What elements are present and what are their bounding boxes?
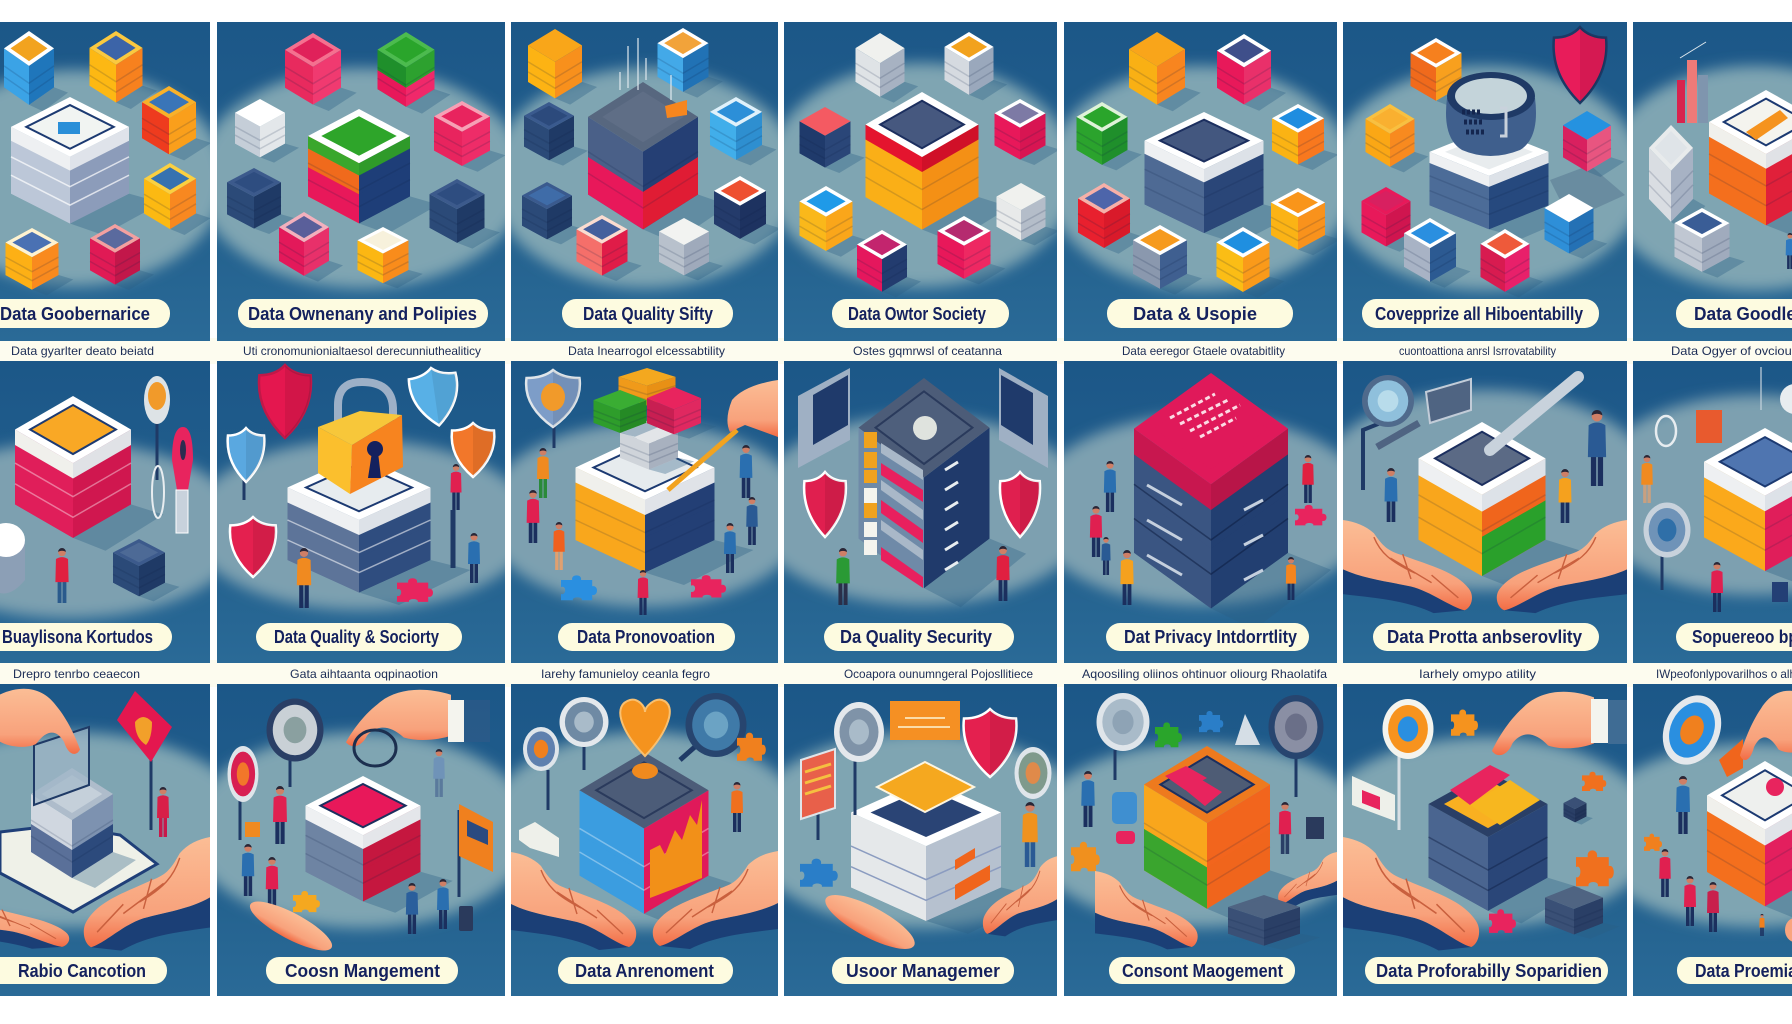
loop bbox=[1656, 416, 1676, 446]
person: blue bbox=[242, 844, 254, 896]
hand: right bbox=[1497, 520, 1627, 613]
circle sign bbox=[1014, 747, 1052, 799]
cube: pink bbox=[994, 99, 1060, 165]
monitor: right bbox=[999, 368, 1048, 468]
shield: light blue bbox=[407, 365, 463, 429]
label pill: Usoor Managemer bbox=[846, 961, 1000, 981]
panel: Consont Maogement bbox=[1064, 684, 1337, 996]
orange note bbox=[1719, 739, 1743, 777]
icon: lock on server bbox=[58, 122, 80, 134]
cylinder bbox=[0, 523, 25, 593]
small dark box bbox=[459, 906, 473, 931]
puzzle: yellow bbox=[293, 891, 320, 912]
ring bbox=[354, 730, 396, 766]
orange sign on pole bbox=[459, 804, 493, 897]
main server bbox=[576, 435, 753, 585]
label pill: Data Quality Sifty bbox=[583, 304, 713, 324]
label pill: Data Anrenoment bbox=[575, 961, 714, 981]
central multi colour stack bbox=[308, 109, 439, 234]
caption: Ostes gqmrwsl of ceatanna bbox=[853, 344, 1002, 358]
label pill: Consont Maogement bbox=[1122, 961, 1283, 981]
panel: Data Pronovoation bbox=[511, 361, 778, 663]
puzzle: orange bbox=[1644, 834, 1662, 851]
cube: orange bbox=[6, 228, 73, 295]
label pill: Data Ownenany and Polipies bbox=[248, 304, 477, 324]
drawer tags bbox=[955, 848, 990, 900]
puzzle: orange top bbox=[1451, 709, 1478, 736]
label pill: Data & Usopie bbox=[1133, 304, 1257, 324]
person: red mid bbox=[1684, 876, 1696, 926]
cube: red bbox=[1480, 229, 1543, 297]
person: red front bbox=[638, 570, 648, 615]
panel: Buaylisona Kortudos bbox=[0, 361, 210, 663]
central orange and red stack bbox=[1709, 90, 1792, 238]
shadow bbox=[1550, 165, 1625, 220]
puzzle piece: pink bbox=[397, 578, 433, 602]
label pill bbox=[1677, 957, 1792, 984]
person: rear pair bbox=[1588, 410, 1606, 486]
hand with pencil bbox=[668, 380, 778, 490]
person: orange right bbox=[1286, 557, 1296, 600]
post bbox=[450, 510, 456, 568]
puzzle: orange lower bbox=[1576, 850, 1614, 886]
label pill: Dat Privacy Intdorrtlity bbox=[1124, 627, 1297, 647]
shield: orange bbox=[452, 423, 494, 477]
block: orange bbox=[618, 368, 691, 409]
top knob bbox=[913, 416, 937, 440]
cube: yellow bbox=[1216, 227, 1284, 298]
tower left face rows bbox=[864, 432, 923, 588]
person: red right bbox=[1302, 455, 1314, 503]
panel: Data Goobernarice bbox=[0, 22, 210, 341]
panel: Data Proforabilly Soparidien bbox=[1343, 684, 1627, 996]
cube: green bbox=[1076, 102, 1142, 170]
tower top text bbox=[1170, 394, 1240, 437]
person: red right bbox=[1707, 882, 1719, 932]
person: small orange bbox=[1759, 914, 1765, 936]
cube: yellow bbox=[358, 227, 423, 288]
cube: pink lower bbox=[938, 216, 1005, 284]
label pill: Data Quality & Sociorty bbox=[274, 627, 439, 647]
panel: Sopuereoo bp bbox=[1633, 361, 1792, 663]
figure: ghost bbox=[433, 749, 445, 797]
label pill: Data Owtor Society bbox=[848, 304, 986, 324]
panel: Da Quality Security bbox=[784, 361, 1057, 663]
bar chart bbox=[1677, 42, 1708, 123]
orange note on stack bbox=[1746, 110, 1788, 140]
hand: left bbox=[1343, 837, 1479, 950]
cube: blue and grey bbox=[1404, 218, 1471, 288]
cube: navy lower bbox=[522, 182, 586, 244]
grey bar bbox=[1377, 423, 1419, 447]
pink blocks in box bbox=[1165, 766, 1222, 806]
dark small box bbox=[1306, 817, 1324, 839]
navy box bbox=[1428, 771, 1581, 923]
orange and green stack bbox=[1418, 422, 1581, 590]
white column bbox=[1649, 125, 1705, 231]
label pill bbox=[238, 299, 488, 328]
label pill: Buaylisona Kortudos bbox=[2, 627, 153, 647]
orange and pink stack bbox=[1707, 761, 1792, 919]
magnifier bbox=[680, 693, 746, 760]
cube: pink right bbox=[434, 101, 506, 172]
puzzle: pink bbox=[1489, 909, 1516, 933]
hand: left bbox=[0, 887, 69, 949]
magnifier bbox=[1362, 375, 1414, 490]
shield: red lower bbox=[230, 517, 276, 577]
shield: red top bbox=[259, 365, 311, 438]
label pill bbox=[1373, 623, 1599, 651]
cube: blue bbox=[1544, 194, 1607, 259]
cube: white bbox=[856, 33, 918, 103]
label pill bbox=[1362, 299, 1599, 328]
panel: Data Quality & Sociorty bbox=[217, 361, 505, 663]
cube: navy upper bbox=[524, 102, 588, 166]
grey plate bbox=[1426, 379, 1471, 423]
panel: Data Owtor Society bbox=[784, 22, 1057, 341]
cube: yellow bbox=[144, 163, 211, 235]
puzzle piece: pink bbox=[691, 575, 726, 598]
small navy box bbox=[1564, 797, 1593, 825]
label pill bbox=[832, 957, 1014, 984]
hand fragment bbox=[1785, 918, 1792, 942]
caption: Data eeregor Gtaele ovatabitlity bbox=[1122, 344, 1285, 358]
person: orange bbox=[1022, 802, 1038, 867]
caption: Data Ogyer of ovciour bbox=[1671, 344, 1792, 358]
person: blue mid bbox=[746, 497, 758, 545]
puzzle: blue bbox=[1199, 711, 1223, 732]
caption: Iarhely omypo atility bbox=[1419, 667, 1536, 681]
central navy and pink stack bbox=[588, 82, 729, 243]
person: blue back bbox=[740, 445, 752, 498]
cube: red and orange bbox=[142, 86, 211, 160]
cube: coral and navy bbox=[800, 107, 865, 173]
puzzle: orange bbox=[1071, 842, 1100, 871]
panel: Data Anrenoment bbox=[511, 684, 778, 996]
white circle bbox=[1780, 384, 1792, 414]
heart with base bbox=[620, 700, 670, 779]
label pill bbox=[0, 299, 170, 328]
small navy box bbox=[1772, 582, 1788, 602]
orange sign on pole bbox=[144, 376, 170, 518]
pole line bbox=[1760, 367, 1762, 410]
data tower bbox=[1134, 373, 1331, 630]
person: blue 2 bbox=[406, 883, 418, 934]
puzzle: orange bbox=[737, 733, 766, 761]
panel: Data Goodle bbox=[1633, 22, 1792, 341]
panel: Covepprize all Hiboentabilly bbox=[1343, 22, 1627, 341]
shield: blue heart on pole bbox=[228, 428, 264, 500]
person: blue bbox=[1385, 468, 1397, 522]
central orange stack bbox=[866, 92, 1010, 242]
person: blue bbox=[1081, 771, 1095, 827]
big tool bbox=[1490, 377, 1578, 450]
server stack bbox=[288, 455, 471, 605]
data tower bbox=[858, 378, 1026, 607]
label pill bbox=[256, 623, 462, 651]
red figure bbox=[157, 787, 169, 837]
glass panel bbox=[34, 727, 89, 805]
pink tool bbox=[172, 427, 193, 533]
caption: Aqoosiling oliinos ohtinuor oliourg Rhaolatifa bbox=[1082, 667, 1327, 681]
white figure bbox=[1235, 714, 1260, 745]
person: blue 3 bbox=[437, 879, 449, 929]
caption: Iarehy famunieloy ceanla fegro bbox=[541, 667, 710, 681]
cube: pink bbox=[1217, 34, 1286, 111]
label pill bbox=[558, 957, 733, 984]
block: green bbox=[594, 390, 661, 437]
panel: Data & Usopie bbox=[1064, 22, 1337, 341]
person: orange small bbox=[553, 522, 565, 570]
cube: white bbox=[659, 218, 723, 280]
puzzle: pink bbox=[1295, 505, 1326, 525]
cube: grey bbox=[1674, 208, 1745, 278]
hand: right bbox=[1278, 852, 1337, 906]
dark box bbox=[1228, 895, 1320, 950]
cube: orange bbox=[1129, 32, 1201, 111]
panel: Data Protta anbserovlity bbox=[1343, 361, 1627, 663]
white card bbox=[1352, 776, 1395, 821]
printer box bbox=[851, 779, 1043, 934]
person: orange bbox=[1120, 550, 1134, 605]
magnifier bbox=[1644, 502, 1690, 590]
jug text bbox=[1462, 112, 1484, 132]
globe sign bbox=[1652, 686, 1732, 774]
label pill bbox=[824, 623, 1014, 651]
label pill bbox=[1109, 957, 1295, 984]
sign on pole bbox=[117, 691, 172, 830]
person: orange bbox=[731, 782, 743, 832]
puzzle: orange right bbox=[1582, 772, 1606, 791]
central white server bbox=[11, 97, 162, 235]
cube: orange bbox=[528, 29, 597, 105]
person: red bbox=[273, 786, 287, 844]
jug on base bbox=[1446, 72, 1536, 156]
cube: pink bbox=[90, 224, 154, 290]
central navy server bbox=[1144, 112, 1297, 244]
cube: blue bbox=[658, 28, 723, 98]
grey block bbox=[620, 420, 694, 474]
person: blue bbox=[468, 533, 480, 583]
drawer marks bbox=[1147, 485, 1263, 580]
server bbox=[306, 776, 453, 913]
pink server bbox=[15, 396, 163, 551]
label pill bbox=[1676, 623, 1792, 651]
upper hand bbox=[0, 689, 80, 754]
upper hand with cuff bbox=[346, 690, 490, 746]
person: orange bbox=[537, 448, 549, 498]
puzzle: green bbox=[1155, 722, 1182, 747]
cube: blue and pink bbox=[1563, 111, 1624, 177]
shield: red bbox=[1554, 27, 1606, 103]
hand: right bbox=[84, 837, 210, 951]
orange tag bbox=[665, 100, 687, 118]
panel: Data Proemia bbox=[1633, 684, 1792, 996]
person: orange bbox=[297, 548, 311, 608]
label pill: Data Proforabilly Soparidien bbox=[1376, 961, 1602, 981]
label pill: Data Protta anbserovlity bbox=[1387, 627, 1582, 647]
tower right face marks bbox=[945, 462, 958, 570]
label pill: Data Pronovoation bbox=[577, 627, 715, 647]
orange and pink stack bbox=[1704, 428, 1792, 584]
cube: red top navy bbox=[714, 176, 781, 244]
panel: Coosn Mangement bbox=[217, 684, 505, 996]
label pill bbox=[832, 299, 1009, 328]
central navy base bbox=[1430, 128, 1582, 238]
shield: pink bbox=[964, 709, 1016, 777]
person: red bbox=[1711, 562, 1723, 612]
puzzle: blue bbox=[800, 859, 838, 887]
label pill: Da Quality Security bbox=[840, 627, 992, 647]
dark box bbox=[1545, 886, 1619, 939]
label pill: Data Goobernarice bbox=[0, 304, 150, 324]
cube: white bbox=[235, 99, 299, 163]
cube: blue and orange bbox=[1272, 104, 1339, 170]
cube: navy right bbox=[430, 179, 500, 249]
hand: left bbox=[1095, 871, 1198, 949]
pink icon on stack bbox=[1766, 778, 1784, 796]
person: red left bbox=[1659, 849, 1671, 897]
contents pink and yellow bbox=[1450, 765, 1540, 825]
cube: light blue bbox=[710, 97, 777, 165]
cube: navy bbox=[113, 539, 180, 601]
striped board on pole bbox=[801, 749, 835, 840]
person: blue 2 bbox=[1101, 537, 1111, 575]
cube: blue and yellow bbox=[800, 186, 867, 257]
person: blue front bbox=[724, 523, 736, 573]
cube: pink lower bbox=[279, 212, 343, 282]
caption: Drepro tenrbo ceaecon bbox=[13, 667, 140, 681]
cube: grey and navy bbox=[1133, 225, 1202, 295]
cube: yellow and orange bbox=[1271, 188, 1340, 255]
hand: left bbox=[511, 852, 636, 950]
label pill bbox=[558, 623, 735, 651]
figure bbox=[1786, 233, 1792, 269]
panel: Data Ownenany and Polipies bbox=[217, 22, 505, 341]
chart on box bbox=[650, 800, 702, 898]
block: pink bbox=[647, 387, 716, 439]
panel: Data Quality Sifty bbox=[511, 22, 778, 341]
person: red bbox=[450, 464, 462, 510]
cube: pink bbox=[285, 33, 357, 111]
hand: right bbox=[653, 851, 778, 949]
cube: salmon bbox=[576, 215, 642, 281]
grey sign on pole bbox=[834, 702, 884, 815]
hand: right bbox=[983, 856, 1058, 936]
label pill bbox=[0, 957, 167, 984]
cube: pink bbox=[1362, 187, 1424, 252]
panel: Dat Privacy Intdorrtlity bbox=[1064, 361, 1337, 663]
cube: magenta and navy bbox=[857, 230, 921, 297]
upper hand with cuff bbox=[1492, 692, 1627, 755]
cube: amber bbox=[90, 31, 157, 109]
shield on pole bbox=[526, 370, 580, 448]
dashboard box bbox=[580, 752, 745, 928]
label pill: Coosn Mangement bbox=[285, 961, 440, 981]
caption: Data Inearrogol elcessabtility bbox=[568, 344, 725, 358]
magnifier on pole bbox=[266, 698, 324, 787]
sign: grey on pole bbox=[560, 697, 608, 770]
monitor: left bbox=[798, 368, 850, 468]
caption: Uti cronomunionialtaesol derecunniuthealiticy bbox=[243, 344, 481, 358]
open box stack bbox=[1144, 746, 1305, 924]
caption: Gata aihtaanta oqpinaotion bbox=[290, 667, 438, 681]
orange tray bbox=[877, 762, 974, 812]
cube: yellow bbox=[1366, 104, 1428, 172]
label pill bbox=[1106, 623, 1309, 651]
person: red bbox=[1279, 802, 1291, 854]
person: red bbox=[1090, 506, 1102, 557]
caption: Ocoapora ounumngeral Pojosllitiece bbox=[844, 667, 1033, 681]
label pill: Covepprize all Hiboentabilly bbox=[1375, 304, 1583, 324]
signal lines bbox=[620, 38, 671, 100]
label pill bbox=[1676, 299, 1792, 328]
circle sign: right bbox=[1268, 695, 1324, 797]
orange note bbox=[890, 701, 960, 740]
blue blob bbox=[1112, 792, 1137, 824]
person: blue bbox=[1676, 776, 1690, 834]
cube: green and pink bbox=[378, 32, 450, 114]
panel: Rabio Cancotion bbox=[0, 684, 210, 996]
cube: grey with orange top bbox=[944, 32, 1007, 100]
person: orange bbox=[1641, 455, 1653, 503]
cube: navy left bbox=[227, 168, 296, 234]
white document plate bbox=[0, 825, 157, 912]
person bbox=[55, 548, 69, 603]
shield: right bbox=[1000, 472, 1040, 537]
sign: colourful on pole bbox=[523, 727, 559, 810]
lower hand bbox=[819, 885, 921, 959]
shield: left bbox=[804, 472, 846, 537]
label pill bbox=[562, 299, 733, 328]
padlock bbox=[318, 382, 403, 494]
caption: Data gyarlter deato beiatd bbox=[11, 344, 154, 358]
caption: cuontoattiona anrsl Isrrovatability bbox=[1399, 344, 1556, 358]
box on plate bbox=[31, 768, 136, 888]
label pill bbox=[1107, 299, 1293, 328]
cube: blue bbox=[4, 31, 68, 111]
person: red bbox=[996, 546, 1010, 601]
label pill bbox=[0, 623, 172, 651]
white box bbox=[519, 822, 559, 857]
puzzle: orange bbox=[245, 822, 260, 837]
label pill bbox=[266, 957, 458, 984]
puzzle piece: blue bbox=[561, 575, 597, 600]
upper hand bbox=[1740, 691, 1792, 760]
target sign on pole bbox=[228, 746, 258, 840]
label pill: Rabio Cancotion bbox=[18, 961, 146, 981]
person: red bbox=[527, 490, 539, 543]
hand: left bbox=[1343, 520, 1472, 613]
circle sign: left bbox=[1096, 693, 1150, 780]
panel: Usoor Managemer bbox=[784, 684, 1057, 996]
cube: white lower bbox=[996, 183, 1059, 245]
label pill bbox=[1365, 957, 1608, 984]
pink blob bbox=[1116, 831, 1135, 844]
lower hand bbox=[244, 893, 338, 959]
cube: red bbox=[1078, 183, 1145, 254]
person: red 2 bbox=[266, 857, 278, 909]
person: orange bbox=[1559, 469, 1571, 523]
pie sign on pole bbox=[1382, 699, 1434, 830]
person: green bbox=[836, 548, 850, 605]
person: blue 1 bbox=[1104, 461, 1116, 512]
small sign bbox=[1696, 410, 1722, 443]
cube: orange bbox=[1410, 38, 1476, 106]
